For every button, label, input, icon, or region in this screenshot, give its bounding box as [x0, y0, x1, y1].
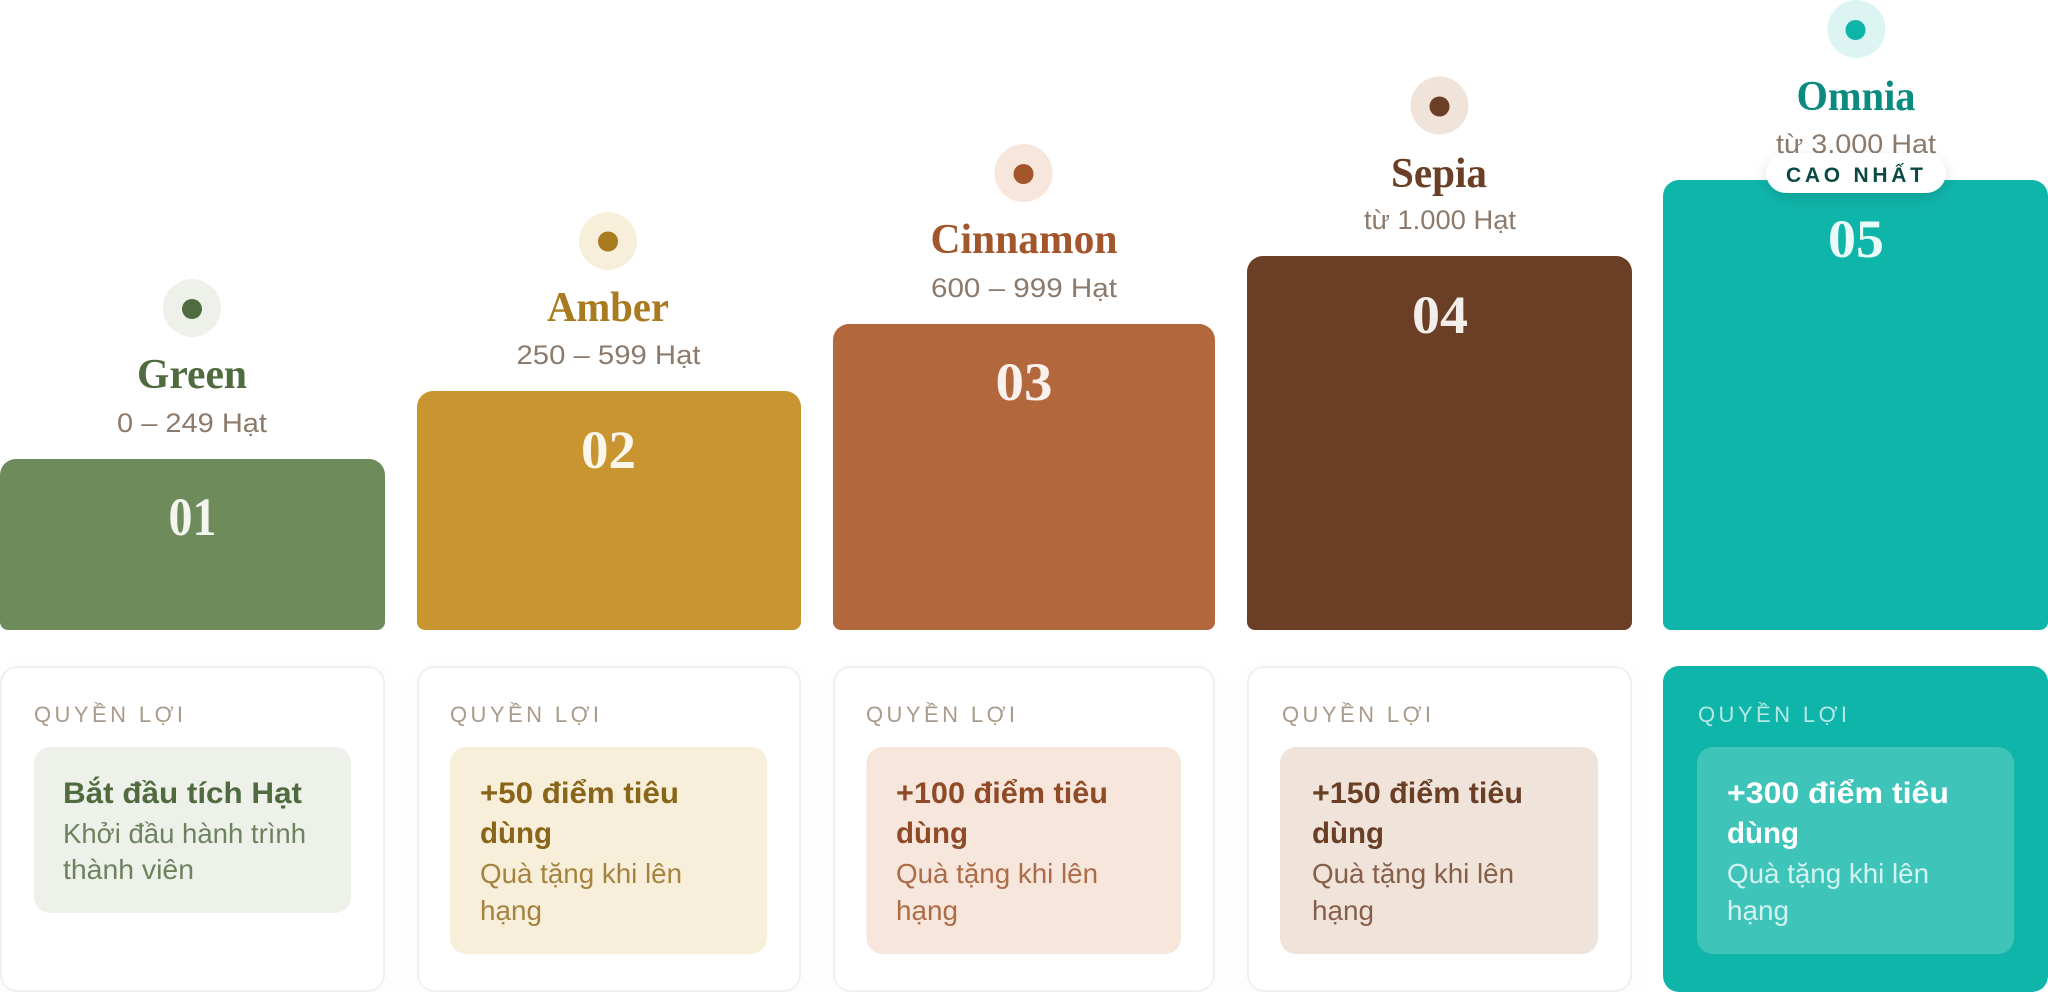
tier name: Green: Green: [137, 352, 247, 398]
benefit box: dùng: [896, 817, 968, 850]
benefit box: dùng: [480, 817, 552, 850]
benefits label: QUYỀN LỢI: [1282, 702, 1431, 727]
step bar: 05: [1663, 180, 2048, 630]
step bar: 03: [833, 324, 1215, 630]
benefit box: [450, 747, 767, 954]
benefit box: [1280, 747, 1598, 954]
badge: CAO NHẤT: CAO NHẤT: [1786, 164, 1923, 187]
benefit box: thành viên: [63, 854, 194, 885]
benefits card: Cinnamon: [834, 667, 1214, 991]
step number: 04: 04: [1412, 285, 1468, 345]
tier column: Amber: [417, 212, 801, 991]
step number: 01: 01: [168, 487, 216, 547]
benefit box: [866, 747, 1181, 954]
tier name: Amber: Amber: [547, 285, 669, 331]
tier range: Green: 0 – 249 Hạt: [117, 408, 268, 438]
tier column: Omnia: [1663, 0, 2048, 992]
benefit box: +100 điểm tiêu: [896, 777, 1108, 810]
benefits label: QUYỀN LỢI: [866, 702, 1015, 727]
benefit box: Quà tặng khi lên: [480, 858, 682, 889]
benefit box: Bắt đầu tích Hạt: [63, 776, 302, 810]
icon: Green tier dot: [163, 279, 221, 337]
step bar: 04: [1247, 256, 1632, 630]
benefits card: Sepia: [1248, 667, 1631, 991]
icon: Sepia tier dot: [1410, 76, 1468, 134]
benefit box: +50 điểm tiêu: [480, 777, 679, 810]
tier range: Omnia: từ 3.000 Hạt: [1776, 129, 1937, 159]
tier column: Sepia: [1247, 76, 1632, 991]
badge: CAO NHẤT: [1766, 153, 1946, 193]
step bar: 01: [0, 459, 385, 630]
benefits label: QUYỀN LỢI: [1698, 702, 1847, 727]
benefit box: +300 điểm tiêu: [1727, 777, 1949, 810]
benefit box: hạng: [896, 895, 958, 926]
benefit box: +150 điểm tiêu: [1312, 777, 1523, 810]
tier column: Cinnamon: [833, 144, 1215, 991]
benefits label: QUYỀN LỢI: [450, 702, 599, 727]
tier range: Amber: 250 – 599 Hạt: [516, 340, 701, 370]
benefits card: Omnia: [1663, 666, 2048, 992]
tier name: Sepia: Sepia: [1391, 151, 1487, 197]
tier column: Green: [0, 279, 385, 991]
benefits card: Green: [1, 667, 384, 991]
icon: Amber tier dot: [579, 212, 637, 270]
benefit box: Quà tặng khi lên: [896, 858, 1098, 889]
step number: 03: 03: [996, 352, 1052, 412]
benefit box: dùng: [1312, 817, 1384, 850]
benefit box: Quà tặng khi lên: [1312, 858, 1514, 889]
benefit box: hạng: [480, 895, 542, 926]
step bar: 02: [417, 391, 801, 630]
benefit box: hạng: [1312, 895, 1374, 926]
tier name: Cinnamon: Cinnamon: [930, 217, 1118, 263]
tier range: Sepia: từ 1.000 Hạt: [1364, 205, 1516, 235]
benefit box: dùng: [1727, 817, 1799, 850]
tier name: Omnia: Omnia: [1796, 74, 1916, 120]
benefit box: [1697, 747, 2014, 954]
tier range: Cinnamon: 600 – 999 Hạt: [931, 273, 1118, 303]
step number: 02: 02: [581, 420, 636, 480]
benefit box: Quà tặng khi lên: [1727, 858, 1929, 889]
benefit box: [34, 747, 351, 913]
icon: Cinnamon tier dot: [994, 144, 1052, 202]
benefits card: Amber: [418, 667, 800, 991]
step number: 05: 05: [1828, 209, 1884, 269]
icon: Omnia tier dot: [1828, 0, 1886, 58]
benefits label: QUYỀN LỢI: [34, 702, 183, 727]
benefit box: hạng: [1727, 895, 1789, 926]
benefit box: Khởi đầu hành trình: [63, 818, 306, 849]
